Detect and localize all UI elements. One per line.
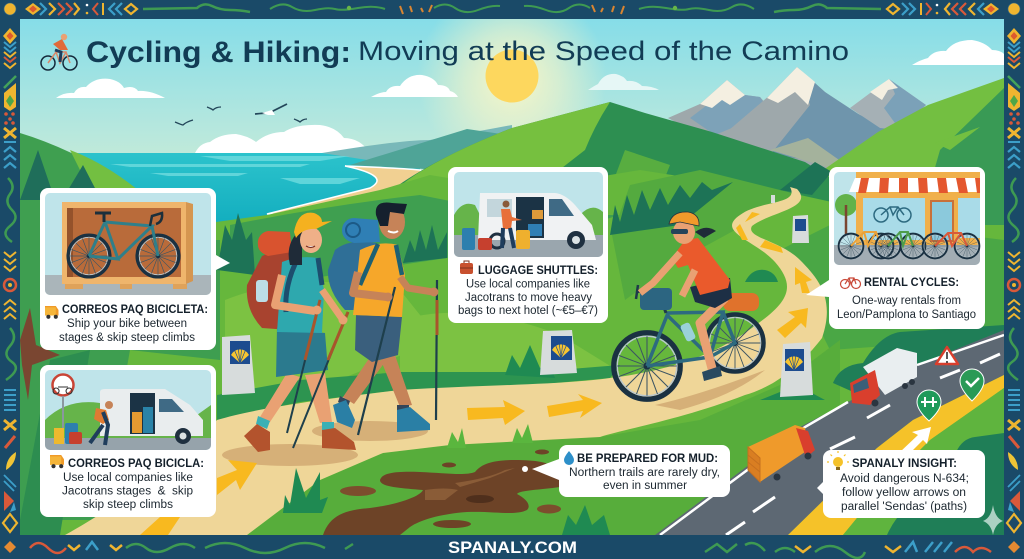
orange truck [748,425,815,482]
body text [569,467,720,492]
forest silhouettes [217,162,1004,395]
panel: luggage shuttles [448,167,608,323]
image: shuttle van with luggage [454,172,603,257]
body text [837,295,976,321]
panel: be prepared for mud [522,445,730,497]
trail shadows [222,370,765,466]
heading: SPANALY INSIGHT: [852,456,957,470]
icon: light bulb [827,451,849,470]
decorative sparkle [983,505,1003,535]
yellow arrow markers [140,212,812,535]
body text: Avoid dangerous N-634; [840,473,969,485]
heading: BE PREPARED FOR MUD: [577,451,718,465]
body text: Leon/Pamplona to Santiago [837,309,976,321]
body text: Northern trails are rarely dry, [569,467,720,479]
body text: One-way rentals from [852,295,961,307]
title: Moving at the Speed of the Camino [358,36,849,66]
foreground meadow [20,170,1004,535]
heading: CORREOS PAQ BICICLA: [68,456,204,470]
body text: parallel 'Sendas' (paths) [841,501,967,513]
icon: cyclist in title [41,34,77,70]
body text: even in summer [603,480,687,492]
heading: CORREOS PAQ BICICLETA: [62,302,208,316]
man hiker [328,202,438,435]
body text: follow yellow arrows on [842,487,966,499]
panel: rental cycles [806,167,985,329]
body text [59,318,195,344]
distant headlands [322,125,515,172]
body text: Ship your bike between [67,318,187,330]
body text [62,472,193,511]
clouds [56,40,1004,153]
waymarker stones [222,195,813,397]
red truck [850,348,917,406]
icon: suitcase [460,261,473,274]
body text: Use local companies like [466,278,590,290]
ground beside road [843,388,1004,535]
body text: Jacotrans stages & skip [62,486,193,498]
heading: RENTAL CYCLES: [864,275,959,289]
sky background [20,19,1004,259]
dark bushes [887,433,1004,535]
body text: Jacotrans to move heavy [465,292,592,304]
right hill [780,78,1004,300]
grass tufts [283,270,825,535]
image: bike in crate [45,193,211,295]
body text: Use local companies like [63,472,193,484]
panel: spanaly insight [817,450,985,518]
sea highlights [110,156,360,184]
green map pin hikers [917,390,941,421]
cyclist on bicycle [614,212,764,399]
icon: water drop [564,451,574,465]
birds [175,104,307,125]
body text [840,473,969,513]
white path arrow [900,427,931,455]
body text: bags to next hotel (~€5–€7) [458,305,598,317]
central green hill [385,102,850,280]
panel: correos paq bicicleta [40,188,230,350]
sea [20,153,420,223]
icon: bicycle [840,278,860,288]
body text [458,278,598,317]
title [86,36,849,69]
green map pin check [960,369,984,401]
warning sign [936,347,958,364]
mud puddle [323,450,561,535]
icon: delivery truck [50,455,64,468]
winding trail [65,187,827,535]
image: bike rental shop [834,172,980,265]
image: van and courier [45,370,211,450]
body text: skip steep climbs [83,499,173,511]
icon: truck [45,306,58,319]
heading: LUGGAGE SHUTTLES: [478,263,598,277]
mountains [668,67,926,170]
woman hiker [244,213,356,452]
road [655,330,1004,535]
sun [417,0,607,173]
beach [267,166,440,215]
title: Cycling & Hiking: [86,36,351,69]
footer website: SPANALY.COM [448,538,577,557]
left hill [20,133,230,340]
tree trunk [20,308,60,400]
panel: correos paq bicicla [40,365,216,517]
body text: stages & skip steep climbs [59,332,195,344]
